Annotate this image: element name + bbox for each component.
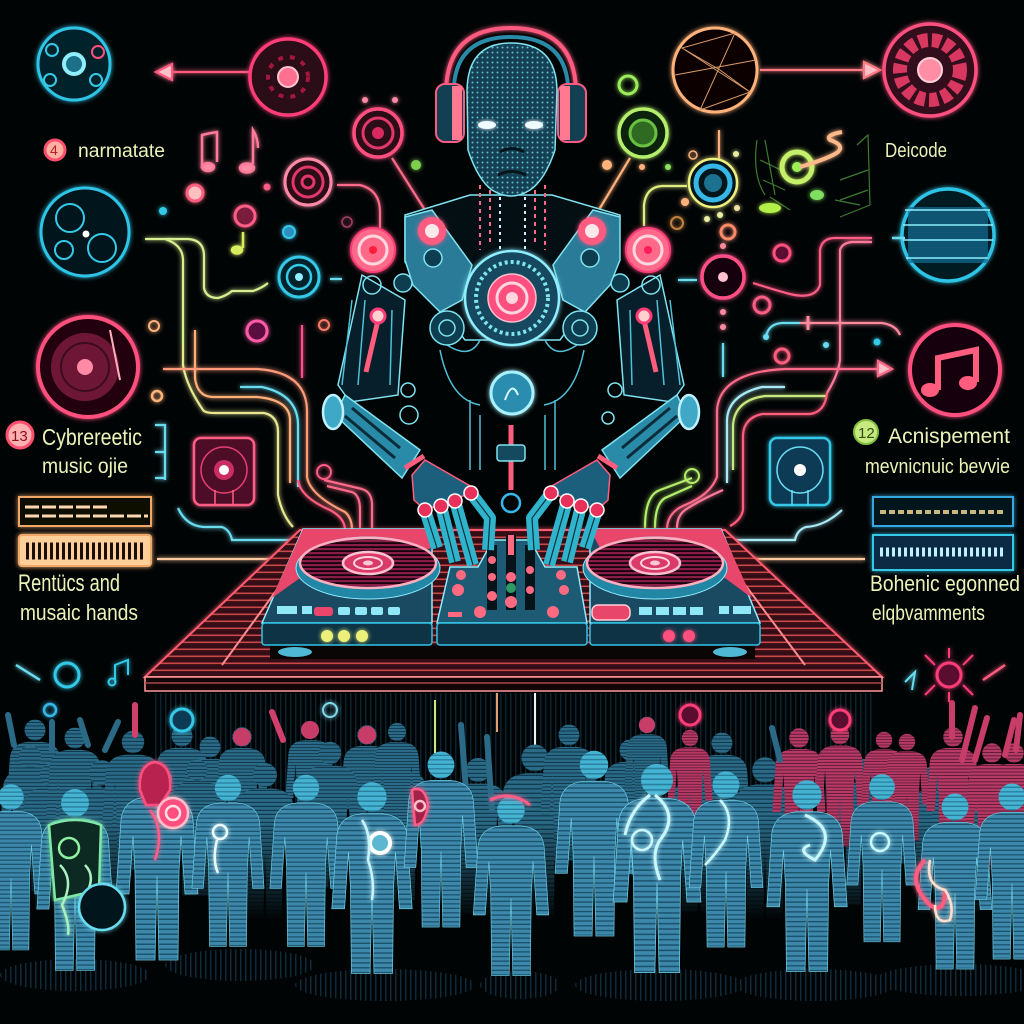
pink heads on blue figures <box>233 717 655 746</box>
left waveform boxes <box>19 497 151 566</box>
label: badge 12 and Acnispement: 12 <box>858 425 875 442</box>
crowd: glowing accents <box>49 762 952 935</box>
red hood and target <box>140 762 188 860</box>
crowd depth fade <box>0 820 1024 920</box>
connector wires <box>145 62 900 559</box>
DJ table <box>145 530 882 691</box>
node: left cyan swirl <box>41 188 129 276</box>
shoulder joints <box>351 217 670 272</box>
under-table hatching <box>155 693 875 803</box>
label: badge 4 and narmatate: 4 <box>50 142 58 158</box>
label: badge 4 and narmatate: narmatate <box>78 141 165 162</box>
label: Bohenic egonned elqbvamments: elqbvamments <box>872 602 985 625</box>
chest core <box>465 251 559 345</box>
eyes <box>478 121 543 129</box>
node: vinyl record <box>38 317 138 417</box>
label: badge 13 and Cybrereetic music ojie <box>7 422 142 478</box>
label: badge 12 and Acnispement <box>854 420 1010 478</box>
crowd accent icons <box>16 648 1005 702</box>
label: Deicode: Deicode <box>885 140 947 162</box>
crowd background cover <box>0 920 1024 1024</box>
left deck <box>262 529 440 645</box>
table supports <box>435 693 535 753</box>
node: right cyan lines panel <box>892 189 994 281</box>
node: top-right pink wheel <box>884 24 976 116</box>
robot upper arms <box>338 274 684 402</box>
music notes <box>202 130 258 254</box>
left square icon <box>194 438 254 505</box>
label: Rentücs and musaic hands: Rentücs and <box>18 570 120 597</box>
robot left hand and forearm <box>323 395 490 565</box>
label: badge 13 and Cybrereetic music ojie: music ojie <box>42 455 128 478</box>
robot figure <box>338 28 684 512</box>
label: badge 13 and Cybrereetic music ojie: 13 <box>11 428 28 445</box>
node: top-left cyan circuit <box>38 28 110 100</box>
label: badge 12 and Acnispement: Acnispement <box>888 425 1010 448</box>
label: Rentücs and musaic hands <box>18 570 138 625</box>
right square icon <box>770 438 830 505</box>
robot right hand and forearm <box>532 395 699 565</box>
floor shadows <box>0 949 1024 1001</box>
blue back figures <box>0 717 995 926</box>
label: badge 4 and narmatate <box>45 140 165 162</box>
glowing head rings <box>44 703 850 731</box>
robot face <box>467 43 557 196</box>
green grid panel with note <box>756 132 870 217</box>
label: badge 13 and Cybrereetic music ojie: Cybrereetic <box>42 424 142 450</box>
right waveform boxes <box>873 497 1013 570</box>
green circuit figure <box>49 820 125 935</box>
label: badge 12 and Acnispement: mevnicnuic bevvie <box>865 456 1010 478</box>
node: music note circle <box>910 325 1000 415</box>
label: Bohenic egonned elqbvamments <box>870 571 1020 625</box>
raised arms <box>8 703 1020 810</box>
lower torso core <box>491 372 533 414</box>
crowd: back row <box>0 703 1024 926</box>
deck feet <box>278 647 747 657</box>
DJ controller <box>262 529 760 657</box>
small pink and green nodes <box>149 76 880 483</box>
node: top-left pink burst <box>250 39 326 115</box>
mixer <box>437 535 587 645</box>
crowd: front row <box>0 751 1024 976</box>
robot torso <box>400 185 622 512</box>
headphones <box>436 28 586 142</box>
pink back figures <box>667 726 1024 870</box>
right deck <box>583 529 760 645</box>
node: top-right orange web <box>673 28 757 112</box>
label: Rentücs and musaic hands: musaic hands <box>20 600 138 625</box>
